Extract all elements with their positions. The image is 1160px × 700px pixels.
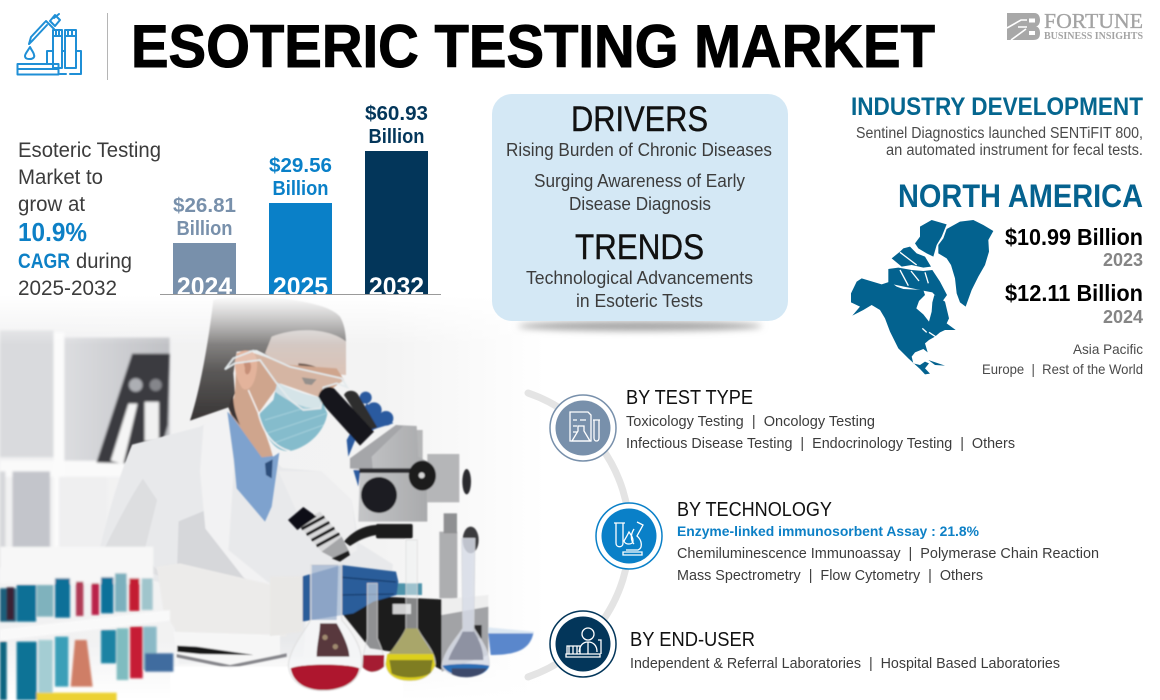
wall background — [0, 296, 545, 700]
bar 2024: Billion — [176, 217, 232, 240]
regional value 2024: $12.11 Billion — [1005, 280, 1143, 306]
microscope upper pole — [416, 430, 423, 462]
Canadian Arctic Archipelago — [888, 268, 947, 302]
CAGR text block: grow at — [18, 193, 85, 216]
face mask — [258, 383, 327, 451]
blurred test tube rack — [0, 547, 173, 700]
yellow flask — [386, 540, 435, 681]
description — [856, 125, 1143, 159]
safety goggles — [225, 351, 347, 410]
mainland — [851, 278, 956, 374]
regional value 2023: $10.99 Billion — [1005, 224, 1143, 250]
trends heading: TRENDS — [575, 228, 704, 267]
blue glove — [302, 565, 398, 622]
description: an automated instrument for fecal tests. — [886, 142, 1143, 159]
other regions — [982, 341, 1143, 377]
segment: by end-user: Independent & Referral Laboratories | Hospital Based Laboratories — [630, 655, 1060, 672]
segment: by technology: BY TECHNOLOGY — [677, 499, 832, 521]
header icon: dropper and test tubes — [18, 14, 81, 74]
regional value 2023 — [1005, 224, 1143, 270]
bar 2025: 2025 — [273, 274, 328, 301]
regional value 2024 — [1005, 280, 1143, 327]
blue flask — [442, 538, 489, 677]
segment: by end-user: BY END-USER — [630, 629, 755, 651]
focus knob — [409, 461, 436, 491]
panel: drivers and trends — [492, 94, 788, 321]
logo mark — [1007, 13, 1040, 40]
segment: by technology: Enzyme-linked immunosorbent Assay : 21.8% — [677, 523, 980, 539]
red flask — [288, 565, 362, 691]
segment: by test type — [626, 387, 1015, 452]
segment: by technology: Mass Spectrometry | Flow Cytometry | Others — [677, 567, 983, 584]
icon: test type — [550, 395, 616, 461]
logo wordmark: FORTUNE — [1044, 9, 1143, 33]
segment: by test type: Toxicology Testing | Oncology Testing — [626, 413, 875, 430]
segment: by technology: Chemiluminescence Immunoassay | Polymerase Chain Reaction — [677, 545, 1099, 562]
logo tagline: BUSINESS INSIGHTS — [1044, 31, 1143, 42]
segment: by test type: BY TEST TYPE — [626, 387, 753, 409]
ear — [235, 350, 257, 390]
CAGR text block: 2025-2032 — [18, 277, 117, 300]
trends list: Technological Advancements — [526, 268, 753, 288]
segment: by end-user — [630, 629, 1060, 672]
base plate — [396, 583, 422, 595]
right block — [427, 454, 459, 502]
head and face — [190, 297, 471, 522]
shelving — [0, 330, 170, 568]
map: North America — [851, 220, 993, 374]
segment: by test type: Infectious Disease Testing | Endocrinology Testing | Others — [626, 435, 1015, 452]
drivers list: Disease Diagnosis — [569, 194, 711, 214]
desk — [0, 640, 545, 700]
Ellesmere Island — [915, 220, 947, 257]
microscope base — [343, 597, 442, 670]
CAGR text block: Market to — [18, 166, 103, 189]
bar 2024: 2024 — [177, 274, 232, 301]
segment arc — [528, 393, 630, 677]
regional value 2023: 2023 — [1103, 250, 1143, 270]
segment: by technology — [677, 499, 1099, 584]
channels and lakes — [900, 252, 936, 337]
header divider — [107, 13, 108, 80]
CAGR text block — [18, 139, 161, 300]
panel shadow — [518, 321, 762, 331]
bar 2024: $26.81 — [173, 194, 236, 217]
bar 2025 — [269, 154, 332, 301]
objective lens — [361, 477, 397, 513]
sleeve and paperwork — [157, 563, 403, 700]
small red flask — [362, 583, 384, 672]
bar 2032 — [365, 102, 428, 301]
drivers list: Surging Awareness of Early — [534, 171, 745, 191]
column — [439, 532, 457, 598]
microscope head — [350, 425, 427, 522]
bar 2032: Billion — [368, 125, 424, 148]
neck and cheek — [230, 352, 344, 457]
drivers list: Rising Burden of Chronic Diseases — [506, 140, 772, 160]
hair strands at neck — [228, 393, 240, 425]
top fade of photo — [0, 295, 560, 345]
Greenland — [938, 220, 993, 307]
icon: end-user — [550, 611, 616, 677]
eyepieces — [344, 391, 377, 431]
sleeve cuff — [270, 576, 303, 636]
blue shirt — [227, 412, 279, 522]
trends list: in Esoteric Tests — [576, 291, 703, 311]
blue bowl — [488, 627, 534, 655]
bar chart: market size — [173, 102, 428, 301]
raised glove — [347, 392, 393, 487]
chart axis — [160, 294, 441, 295]
Caribbean islands — [928, 360, 945, 366]
industry development — [851, 93, 1143, 159]
bar 2032: 2032 — [369, 274, 424, 301]
forehead — [265, 330, 346, 375]
lower microscope and flasks — [270, 507, 534, 691]
stand knob — [463, 527, 479, 553]
CAGR text block: during — [76, 250, 132, 273]
bar 2025: Billion — [272, 177, 328, 200]
bar 2024 — [173, 194, 236, 301]
title: ESOTERIC TESTING MARKET — [131, 13, 935, 80]
logo: Fortune Business Insights — [1007, 9, 1143, 42]
bar 2032: $60.93 — [365, 102, 428, 125]
side knob — [462, 469, 471, 494]
eye — [302, 377, 317, 385]
eyebrow — [298, 363, 327, 374]
CAGR text block: 10.9% — [18, 217, 87, 247]
bar 2025: $29.56 — [269, 154, 332, 177]
CAGR text block: CAGR — [18, 250, 70, 273]
lab coat — [96, 409, 393, 664]
other regions: Asia Pacific — [1073, 341, 1143, 357]
other regions: Europe | Rest of the World — [982, 361, 1143, 377]
drivers list — [506, 140, 772, 214]
hair — [190, 297, 346, 421]
photo: scientist at microscope — [0, 296, 545, 700]
drivers heading: DRIVERS — [571, 100, 708, 139]
icon: technology — [596, 503, 662, 569]
objective assembly — [344, 525, 377, 546]
regional value 2024: 2024 — [1103, 307, 1143, 327]
trends list — [526, 268, 753, 311]
Queen Elizabeth Islands — [892, 247, 931, 268]
CAGR text block: Esoteric Testing — [18, 139, 161, 162]
landmasses — [851, 220, 993, 374]
